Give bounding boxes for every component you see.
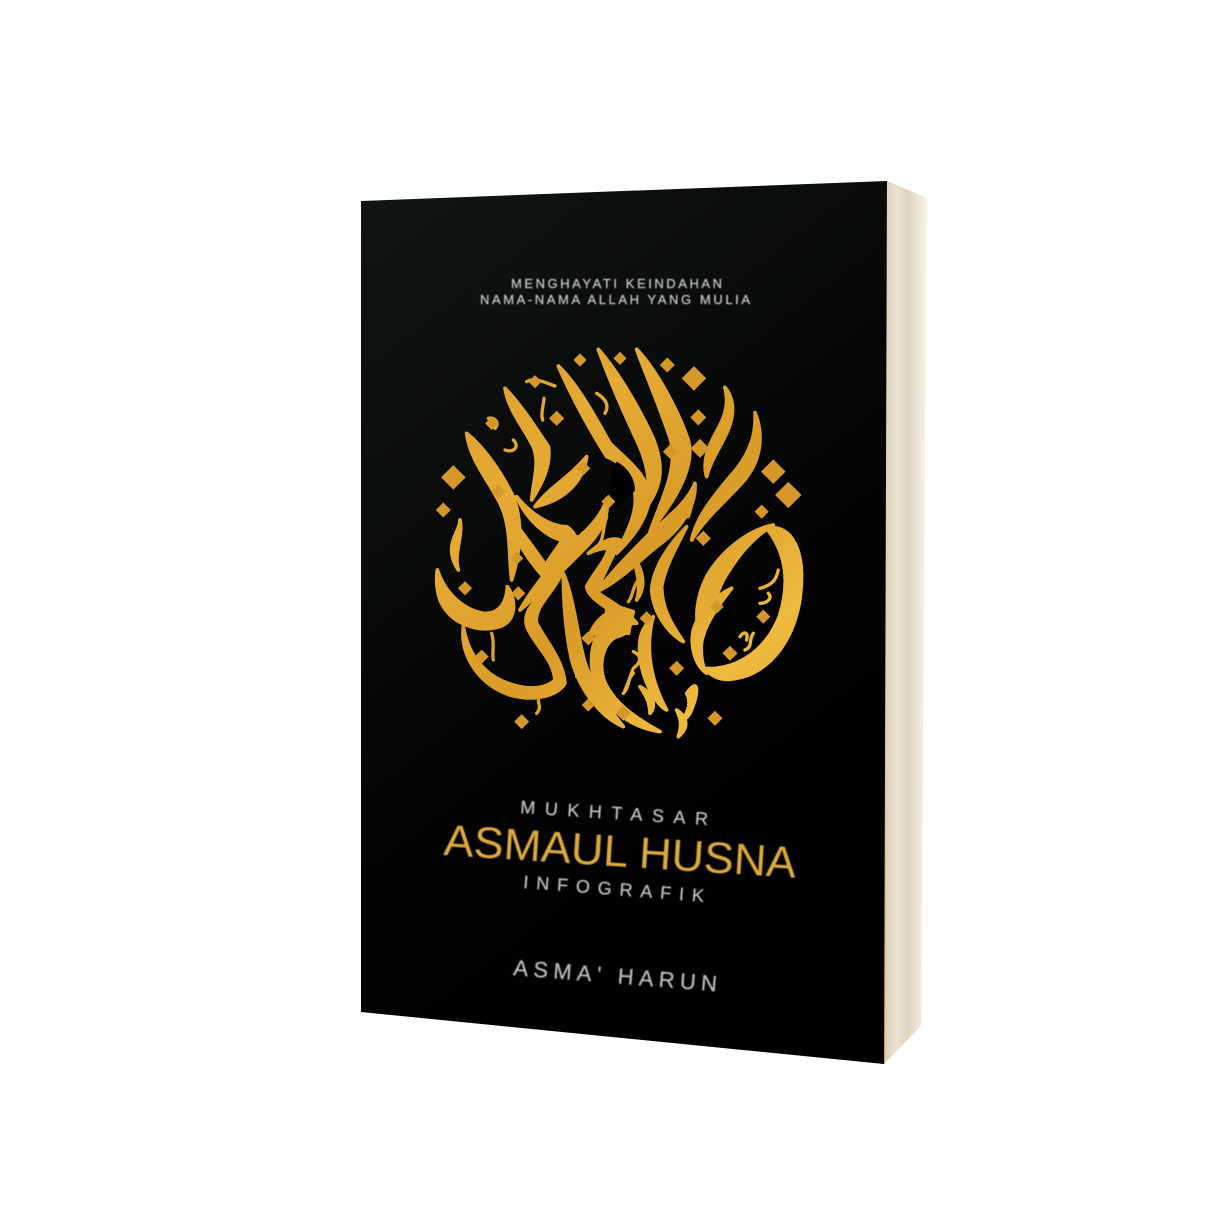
page block of the book — [881, 181, 927, 1064]
central long strokes — [563, 573, 623, 727]
central diagonal strokes — [597, 483, 695, 592]
subtitle text — [480, 276, 750, 307]
subtitle text: MENGHAYATI KEINDAHAN — [511, 276, 722, 291]
main title group — [442, 797, 798, 996]
tall alif strokes — [637, 349, 690, 532]
upper right strokes — [692, 413, 760, 540]
calligraphy emblem — [436, 349, 802, 737]
left bowl — [437, 570, 514, 629]
square dots — [436, 352, 801, 729]
right bowl — [705, 528, 802, 679]
author name: ASMA' HARUN — [513, 955, 718, 996]
label: infografik: INFOGRAFIK — [523, 872, 705, 906]
subtitle text: NAMA-NAMA ALLAH YANG MULIA — [480, 292, 750, 307]
label: mukhtasar: MUKHTASAR — [520, 797, 709, 829]
front cover — [361, 181, 887, 1064]
counter of the central loop — [610, 462, 635, 510]
title: asmaul husna: ASMAUL HUSNA — [442, 816, 798, 888]
diacritic marks — [488, 380, 778, 713]
lower left bowl — [463, 573, 565, 698]
